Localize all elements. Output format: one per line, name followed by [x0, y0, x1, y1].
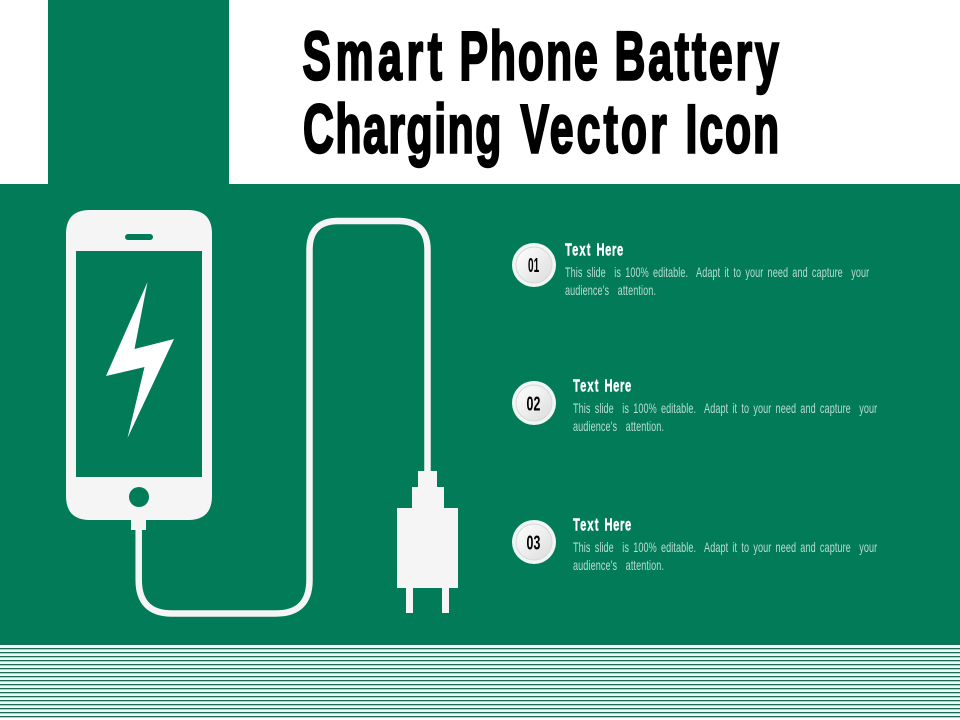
- title: Icon: [686, 91, 779, 168]
- title: Smart: [302, 18, 442, 95]
- icon: smartphone: [66, 210, 212, 520]
- text 01: Here: [596, 240, 623, 260]
- item 01: [512, 240, 869, 299]
- text 01: audience's attention.: [565, 282, 656, 299]
- text 02: Text: [573, 376, 598, 396]
- item 03: [512, 515, 877, 574]
- title: Phone: [460, 18, 598, 95]
- text 03: Here: [604, 515, 631, 535]
- text 01: [565, 240, 869, 299]
- text 03: This slide is 100% editable. Adapt it to your need and capture your: [573, 539, 877, 556]
- item 02: [512, 376, 877, 435]
- icon: charger plug: [397, 471, 458, 613]
- charging cable: [131, 221, 428, 614]
- text 01: Text: [565, 240, 590, 260]
- text 02: audience's attention.: [573, 418, 664, 435]
- badge 03: 03: [526, 531, 540, 554]
- striped footer band: [0, 644, 960, 718]
- text 01: This slide is 100% editable. Adapt it to your need and capture your: [565, 264, 869, 281]
- icon: lightning bolt: [106, 282, 174, 438]
- text 03: [573, 515, 877, 574]
- title: [302, 18, 779, 168]
- text 03: Text: [573, 515, 598, 535]
- text 03: audience's attention.: [573, 557, 664, 574]
- badge 02: [512, 381, 556, 425]
- title: Charging: [303, 91, 501, 168]
- title: Battery: [614, 18, 779, 95]
- text 02: [573, 376, 877, 435]
- title: Vector: [520, 91, 667, 168]
- badge 03: [512, 520, 556, 564]
- text 02: This slide is 100% editable. Adapt it to your need and capture your: [573, 400, 877, 417]
- badge 02: 02: [526, 392, 540, 415]
- badge 01: 01: [528, 256, 539, 277]
- badge 01: [512, 243, 556, 287]
- text 02: Here: [604, 376, 631, 396]
